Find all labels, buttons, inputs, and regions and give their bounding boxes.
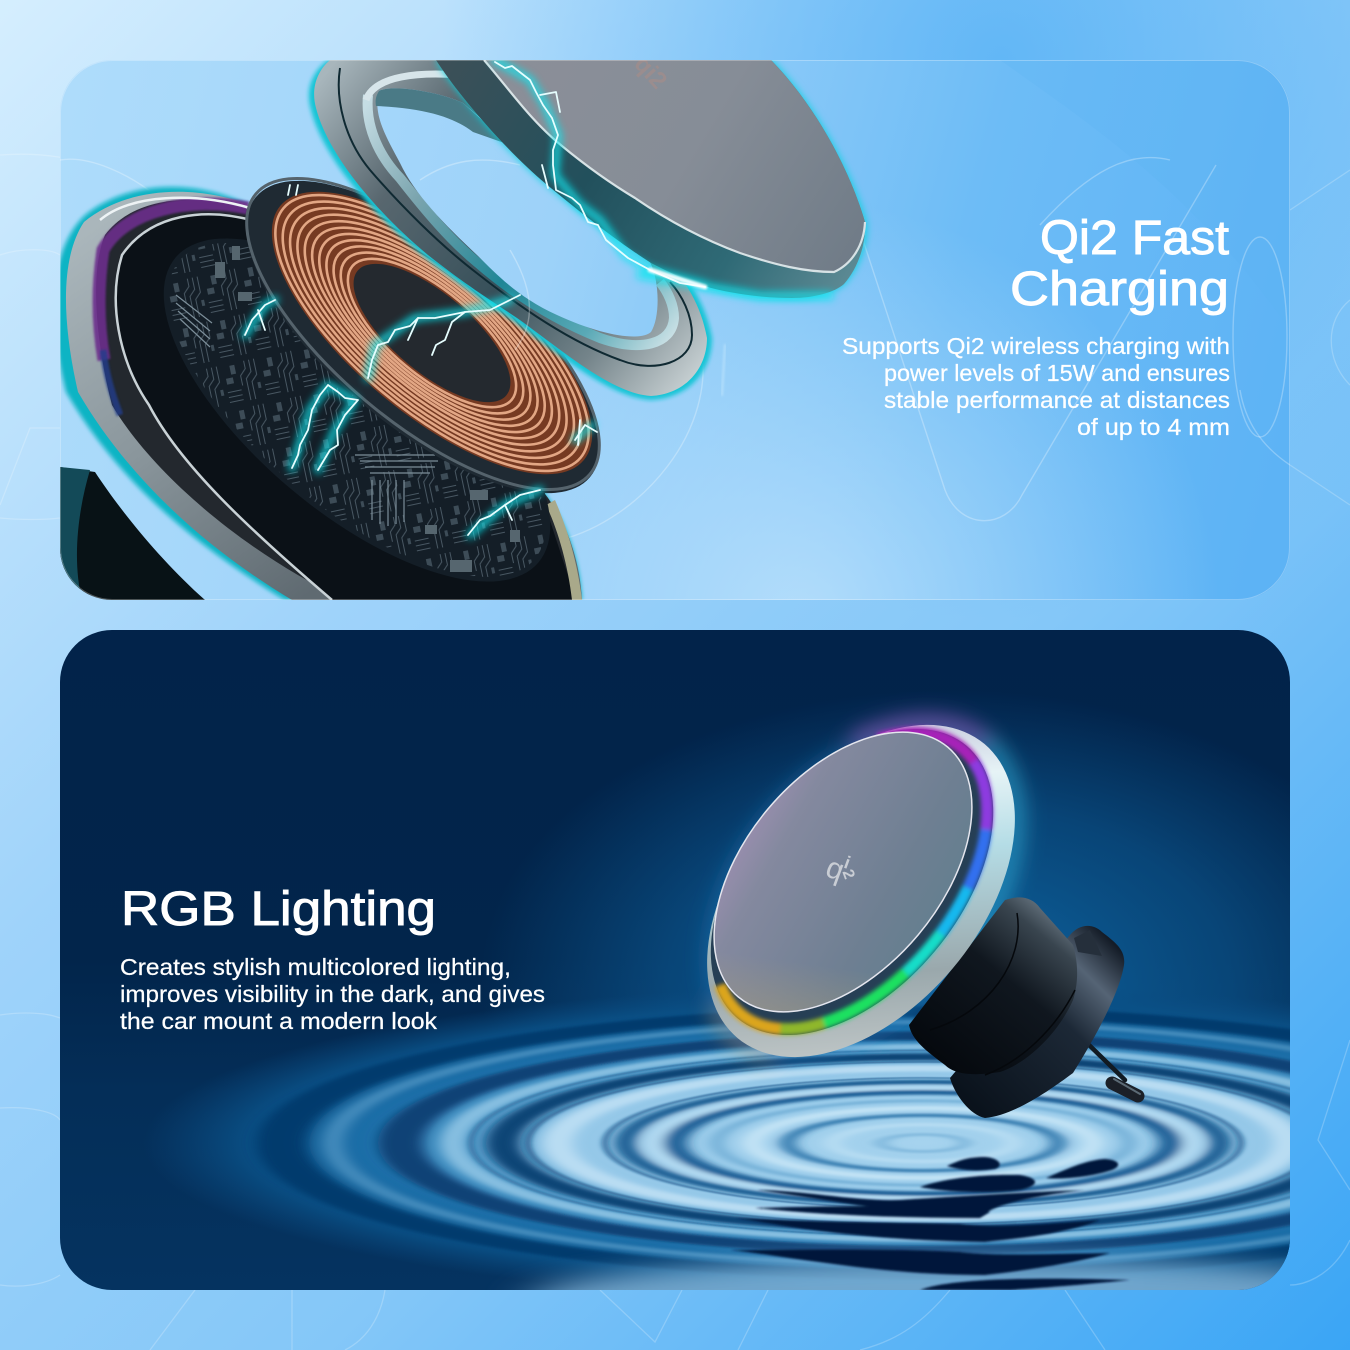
cylinder body	[909, 897, 1077, 1074]
wireless charging copper coil	[245, 177, 601, 494]
qi2 logo: qi2	[629, 51, 672, 94]
qi2 logo: 2	[838, 867, 857, 882]
outer rim	[707, 724, 1015, 1058]
description: Qi2 fast charging: power levels of 15W and ensures	[884, 360, 1230, 386]
water reflection	[730, 1157, 1130, 1290]
heading: Qi2 Fast Charging: Charging	[1010, 263, 1229, 316]
description: Qi2 fast charging: stable performance at distances	[884, 387, 1230, 413]
light channel	[710, 729, 994, 1035]
metal ring	[309, 60, 712, 400]
lightning bolts	[245, 60, 830, 535]
water ripples	[166, 992, 1290, 1290]
qi2 logo: q	[822, 851, 849, 888]
heading: Qi2 Fast Charging	[1010, 212, 1229, 316]
car mount product	[698, 702, 1144, 1118]
qi2 logo: i	[842, 852, 853, 873]
vent pin	[1087, 1043, 1140, 1096]
panel: RGB lighting	[60, 630, 1290, 1290]
housing: outer rim and shell	[54, 187, 582, 600]
heading: RGB Lighting: RGB Lighting	[121, 883, 436, 936]
description: Qi2 fast charging: Supports Qi2 wireless charging with	[842, 333, 1230, 359]
description: RGB lighting: Creates stylish multicolored lighting,	[120, 954, 511, 980]
description: RGB lighting	[120, 958, 544, 1030]
panel: Qi2 fast charging	[54, 51, 1290, 641]
panel background	[60, 60, 1290, 600]
panel background	[60, 630, 1290, 1290]
device glow	[698, 702, 1036, 1070]
description: Qi2 fast charging	[842, 333, 1230, 440]
description: RGB lighting: improves visibility in the dark, and gives	[120, 981, 545, 1007]
qi2 logo	[826, 856, 854, 886]
heading: Qi2 Fast Charging: Qi2 Fast	[1040, 212, 1229, 265]
description: Qi2 fast charging: of up to 4 mm	[1077, 414, 1230, 440]
frosted charging surface	[713, 731, 973, 1013]
top charging disc	[436, 51, 866, 298]
clip plate	[950, 926, 1124, 1118]
circuit board disc	[164, 238, 550, 582]
ring opening	[377, 88, 658, 337]
description: RGB lighting: the car mount a modern look	[120, 1008, 437, 1034]
RGB light strip	[712, 724, 997, 1038]
